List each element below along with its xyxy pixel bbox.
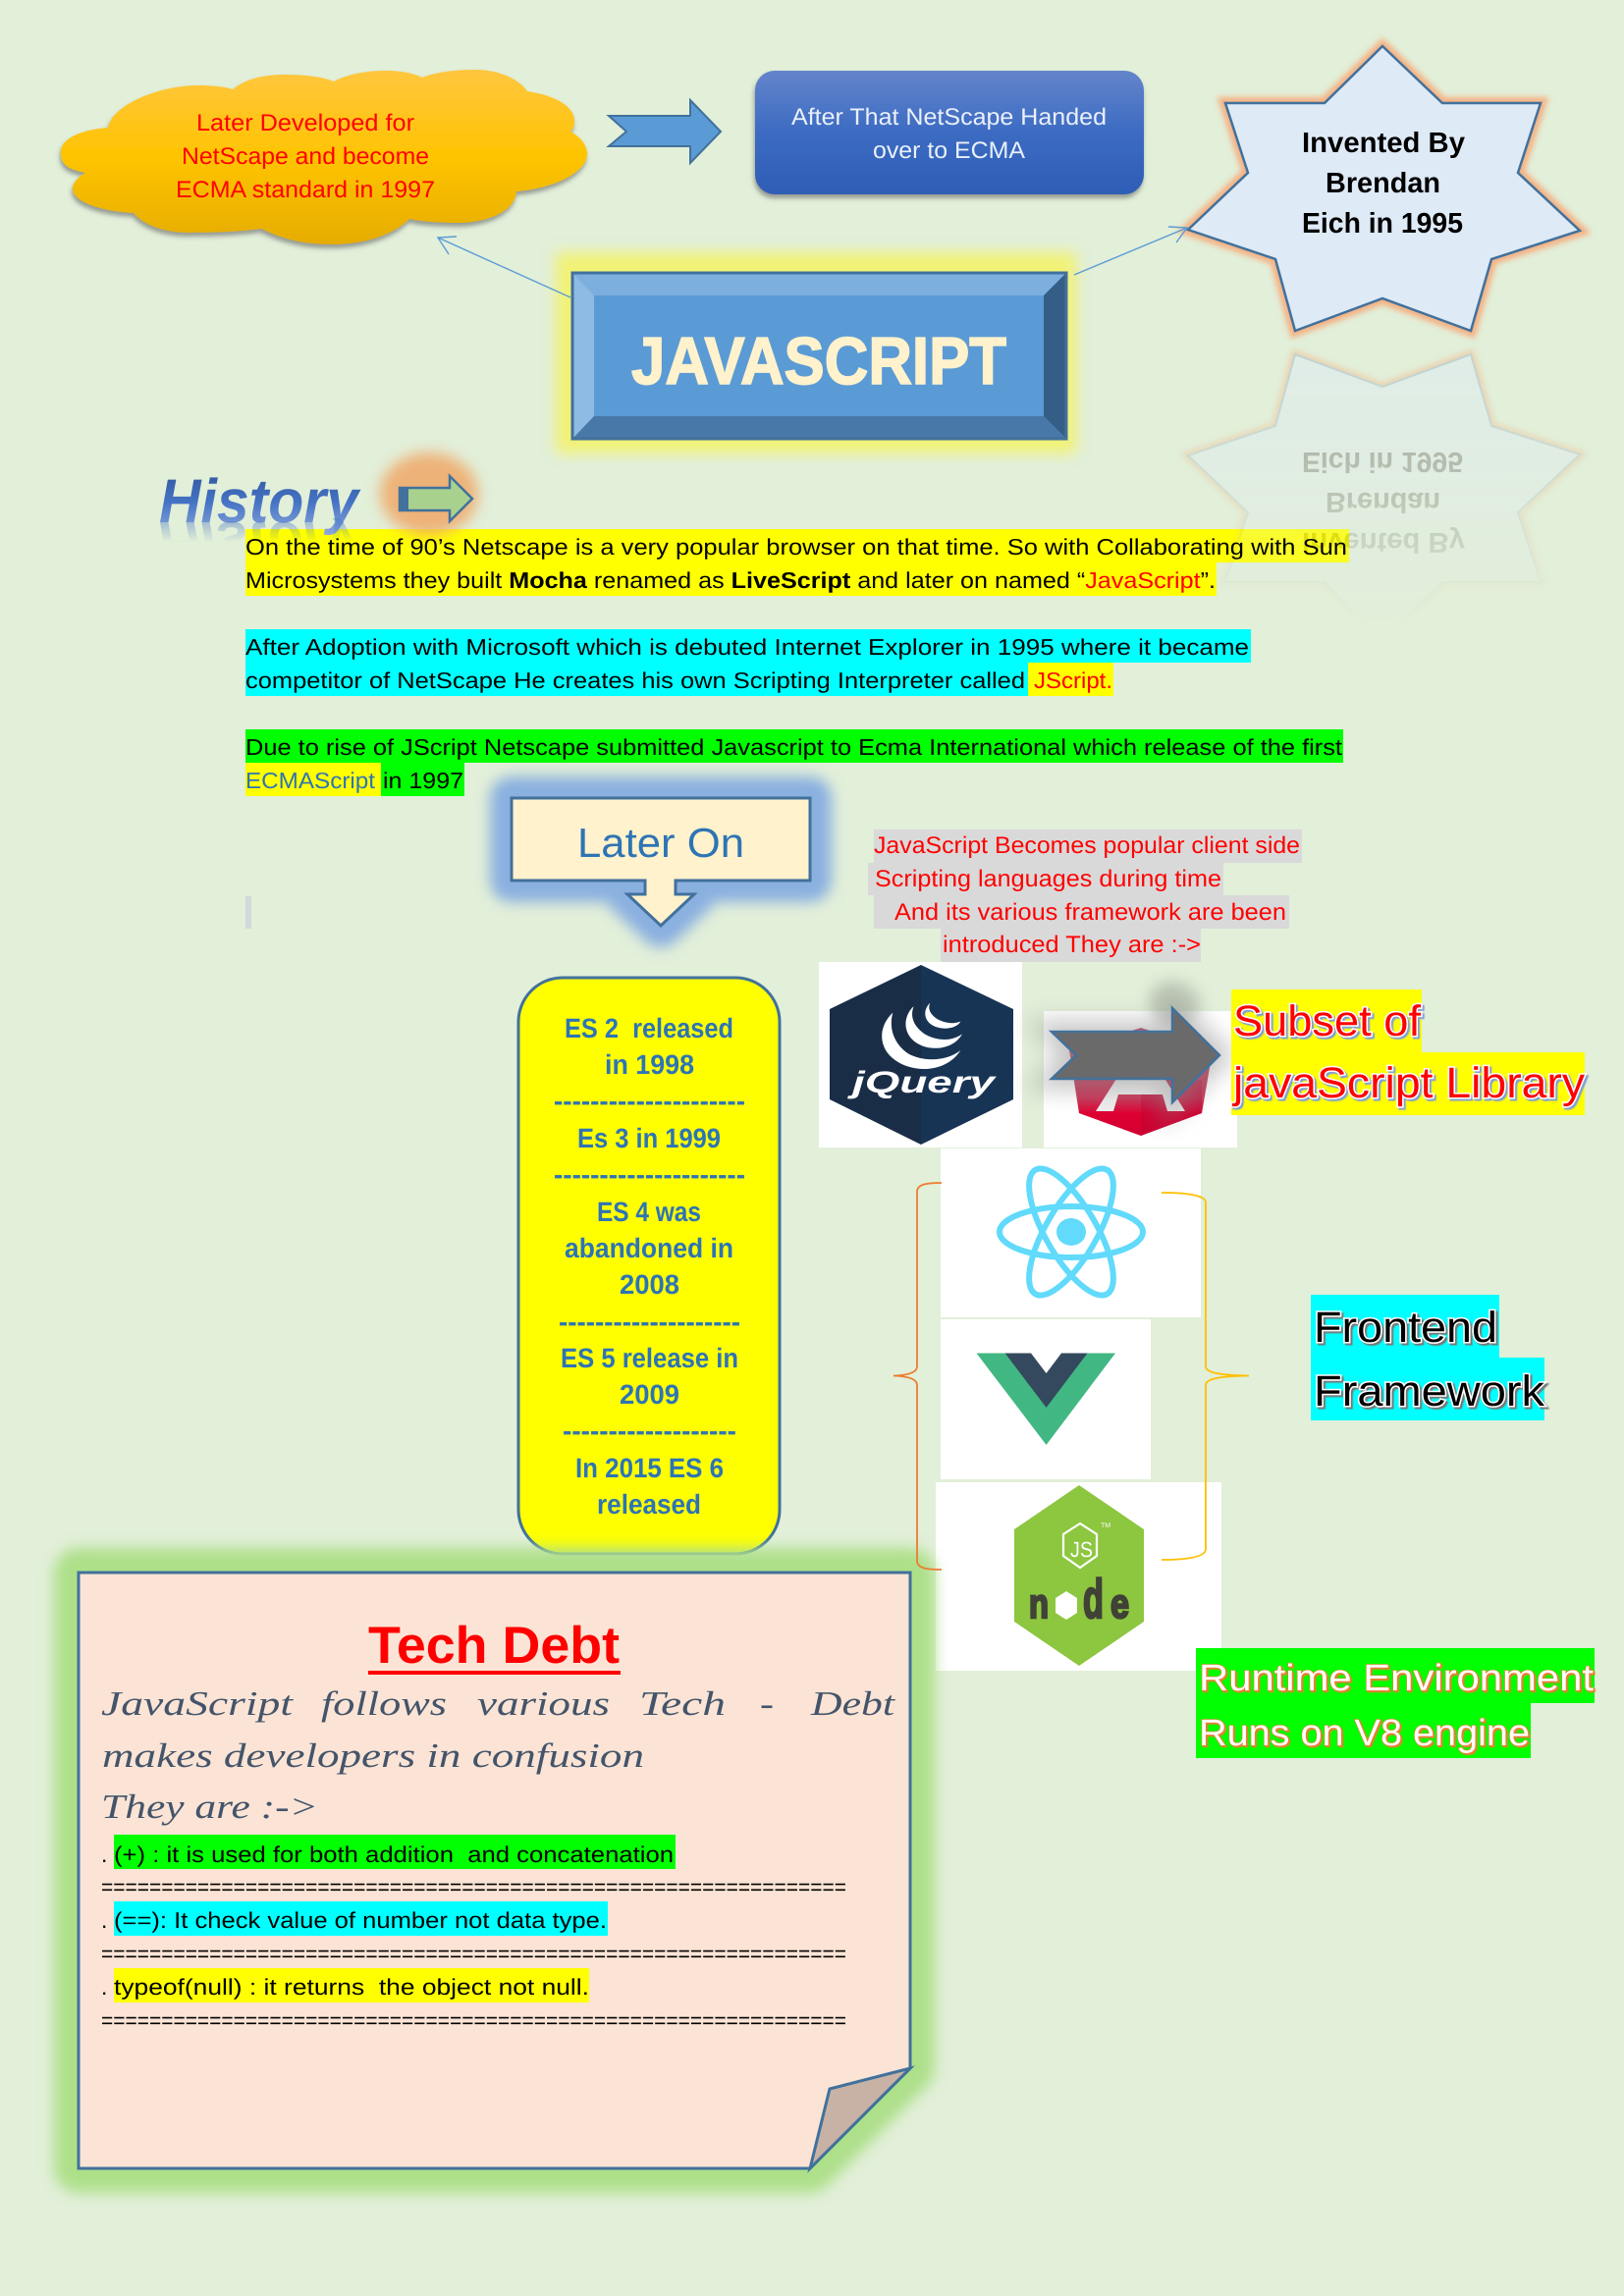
label: runtime environment	[1196, 1648, 1595, 1758]
paragraph text: ECMAScript: Due to rise of JScript Netscape submitted Javascript to Ecma International which release of the first	[245, 734, 1343, 760]
text block: frameworks intro	[868, 829, 1302, 962]
icon: Angular logo	[1044, 1011, 1237, 1148]
label: frontend framework: Framework	[1314, 1367, 1545, 1415]
panel: ES versions timeline: --------------------	[559, 1307, 740, 1337]
brace: right gold	[1162, 1193, 1249, 1560]
paragraph text: ECMAScript: ECMAScript	[245, 768, 376, 793]
cloud: later developed: NetScape and become	[182, 143, 429, 170]
note title: Tech Debt	[368, 1617, 620, 1675]
icon: Node logo: d	[1083, 1568, 1104, 1629]
label: subset of javaScript library: javaScript Library	[1231, 1059, 1585, 1107]
paragraph text: Microsoft and JScript: JScript.	[1034, 667, 1112, 693]
note list	[101, 1835, 846, 2033]
label: runtime environment: Runs on V8 engine	[1199, 1713, 1530, 1754]
icon: React logo	[941, 1148, 1201, 1317]
panel: ES versions timeline: released	[597, 1489, 701, 1520]
icon: Node logo: n	[1029, 1580, 1049, 1627]
paragraph text: Netscape and Mocha: Microsystems they built Mocha renamed as LiveScript and later on named “ JavaScript ”.	[245, 567, 1216, 593]
panel: ES versions timeline: 2009	[620, 1379, 679, 1410]
icon: Node logo	[936, 1482, 1221, 1671]
icon: jQuery logo	[819, 962, 1022, 1148]
paragraph text: Netscape and Mocha	[245, 534, 1347, 593]
panel: ES versions timeline: ES 4 was	[597, 1197, 701, 1227]
star reflection: Brendan	[1326, 486, 1440, 517]
paragraph text: Microsoft and JScript: After Adoption with Microsoft which is debuted Internet Explorer in 1995 where it became	[245, 634, 1249, 660]
panel: ES versions timeline: Es 3 in 1999	[577, 1123, 721, 1153]
icon: jQuery logo: jQuery	[846, 1065, 998, 1099]
note intro handwriting: They are :->	[101, 1788, 318, 1826]
note list: ==============================================================	[101, 1874, 846, 1899]
panel: Tech Debt note	[79, 1573, 910, 2168]
box: handed over to ECMA	[755, 71, 1144, 194]
star reflection	[1182, 347, 1587, 573]
label: runtime environment: Runtime Environment	[1199, 1658, 1594, 1699]
label: frontend framework: Frontend	[1314, 1304, 1497, 1352]
label: frontend framework	[1311, 1295, 1545, 1420]
panel: ES versions timeline: abandoned in	[565, 1233, 733, 1263]
star: invented by: Eich in 1995	[1302, 208, 1463, 240]
note intro handwriting: various	[477, 1684, 610, 1723]
paragraph text: Microsoft and JScript: competitor of NetScape He creates his own Scripting Interpreter called	[245, 667, 1025, 693]
note intro handwriting: makes developers in confusion	[102, 1736, 644, 1775]
label: subset of javaScript library: Subset of	[1233, 997, 1422, 1045]
box: handed over to ECMA: over to ECMA	[873, 137, 1025, 164]
paragraph text: Netscape and Mocha: On the time of 90’s Netscape is a very popular browser on that time. So with Collaborating with Sun	[245, 534, 1347, 560]
box: handed over to ECMA: After That NetScape Handed	[791, 104, 1107, 131]
panel: ES versions timeline: in 1998	[605, 1049, 694, 1080]
note list: ==============================================================	[101, 2007, 846, 2033]
callout: Later On	[512, 798, 810, 926]
text block: frameworks intro: JavaScript Becomes popular client side	[874, 832, 1300, 859]
title: JAVASCRIPT bevel	[556, 252, 1076, 454]
panel: ES versions timeline: In 2015 ES 6	[575, 1453, 724, 1483]
star: invented by: Invented By	[1302, 128, 1465, 159]
cloud: later developed	[61, 70, 587, 244]
note list: (==): It check value of number not data type.	[114, 1907, 607, 1933]
paragraph text: ECMAScript	[245, 734, 1343, 793]
panel: ES versions timeline	[518, 978, 780, 1554]
heading reflection: History	[159, 508, 361, 577]
text block: frameworks intro: Scripting languages during time	[875, 866, 1221, 892]
connector arrow: title to star	[1074, 227, 1187, 275]
icon: Node logo: e	[1110, 1580, 1129, 1627]
star: invented by: Brendan	[1326, 168, 1440, 199]
heading: History: History	[159, 467, 361, 536]
panel: ES versions timeline: ES 2 released	[565, 1013, 733, 1043]
small gray mark	[245, 896, 251, 929]
note intro handwriting: Tech	[639, 1684, 726, 1723]
note list: (+) : it is used for both addition and concatenation	[114, 1842, 674, 1867]
note intro handwriting: follows	[321, 1684, 447, 1723]
star reflection: Eich in 1995	[1302, 446, 1463, 477]
icon: Node logo: o	[1056, 1580, 1076, 1627]
note list: ==============================================================	[101, 1941, 846, 1966]
note intro handwriting	[101, 1684, 896, 1826]
text block: frameworks intro: introduced They are :->	[943, 932, 1201, 958]
icon: Vue logo	[941, 1319, 1151, 1479]
icon: history arrow with glow	[380, 453, 478, 535]
connector arrow: title to cloud	[438, 237, 570, 297]
note fold	[810, 2068, 910, 2168]
note list: .	[101, 1974, 107, 2000]
paragraph text: Microsoft and JScript	[245, 634, 1249, 693]
arrow shadow and arrow over Angular	[1052, 982, 1219, 1102]
panel: ES versions timeline: 2008	[620, 1269, 679, 1300]
note list: .	[101, 1907, 107, 1933]
icon: Node logo: TM	[1101, 1522, 1110, 1529]
note intro handwriting: Debt	[810, 1684, 896, 1723]
panel: ES versions timeline: ES 5 release in	[561, 1343, 738, 1373]
note list: typeof(null) : it returns the object not null.	[114, 1974, 589, 2000]
note intro handwriting: -	[760, 1684, 774, 1723]
cloud: later developed: ECMA standard in 1997	[176, 177, 435, 203]
panel: ES versions timeline: ---------------------	[554, 1159, 745, 1190]
panel: ES versions timeline: -------------------	[563, 1415, 736, 1446]
title: JAVASCRIPT bevel: JAVASCRIPT	[631, 324, 1006, 399]
panel: ES versions timeline: ---------------------	[554, 1086, 745, 1116]
icon: Node logo: JS	[1070, 1537, 1093, 1562]
label: subset of javaScript library	[1231, 989, 1585, 1115]
note list: .	[101, 1842, 107, 1867]
paragraph highlights	[245, 529, 1349, 796]
star: invented by	[1188, 46, 1580, 331]
note intro handwriting: JavaScript	[101, 1684, 295, 1723]
paragraph text: ECMAScript: in 1997	[383, 768, 463, 793]
brace: left orange	[893, 1183, 942, 1570]
text block: frameworks intro: And its various framework are been	[894, 899, 1286, 926]
callout: Later On: Later On	[577, 820, 744, 866]
arrow: cloud to blue box	[609, 100, 721, 163]
star reflection: Invented By	[1302, 526, 1465, 558]
cloud: later developed: Later Developed for	[196, 110, 414, 136]
